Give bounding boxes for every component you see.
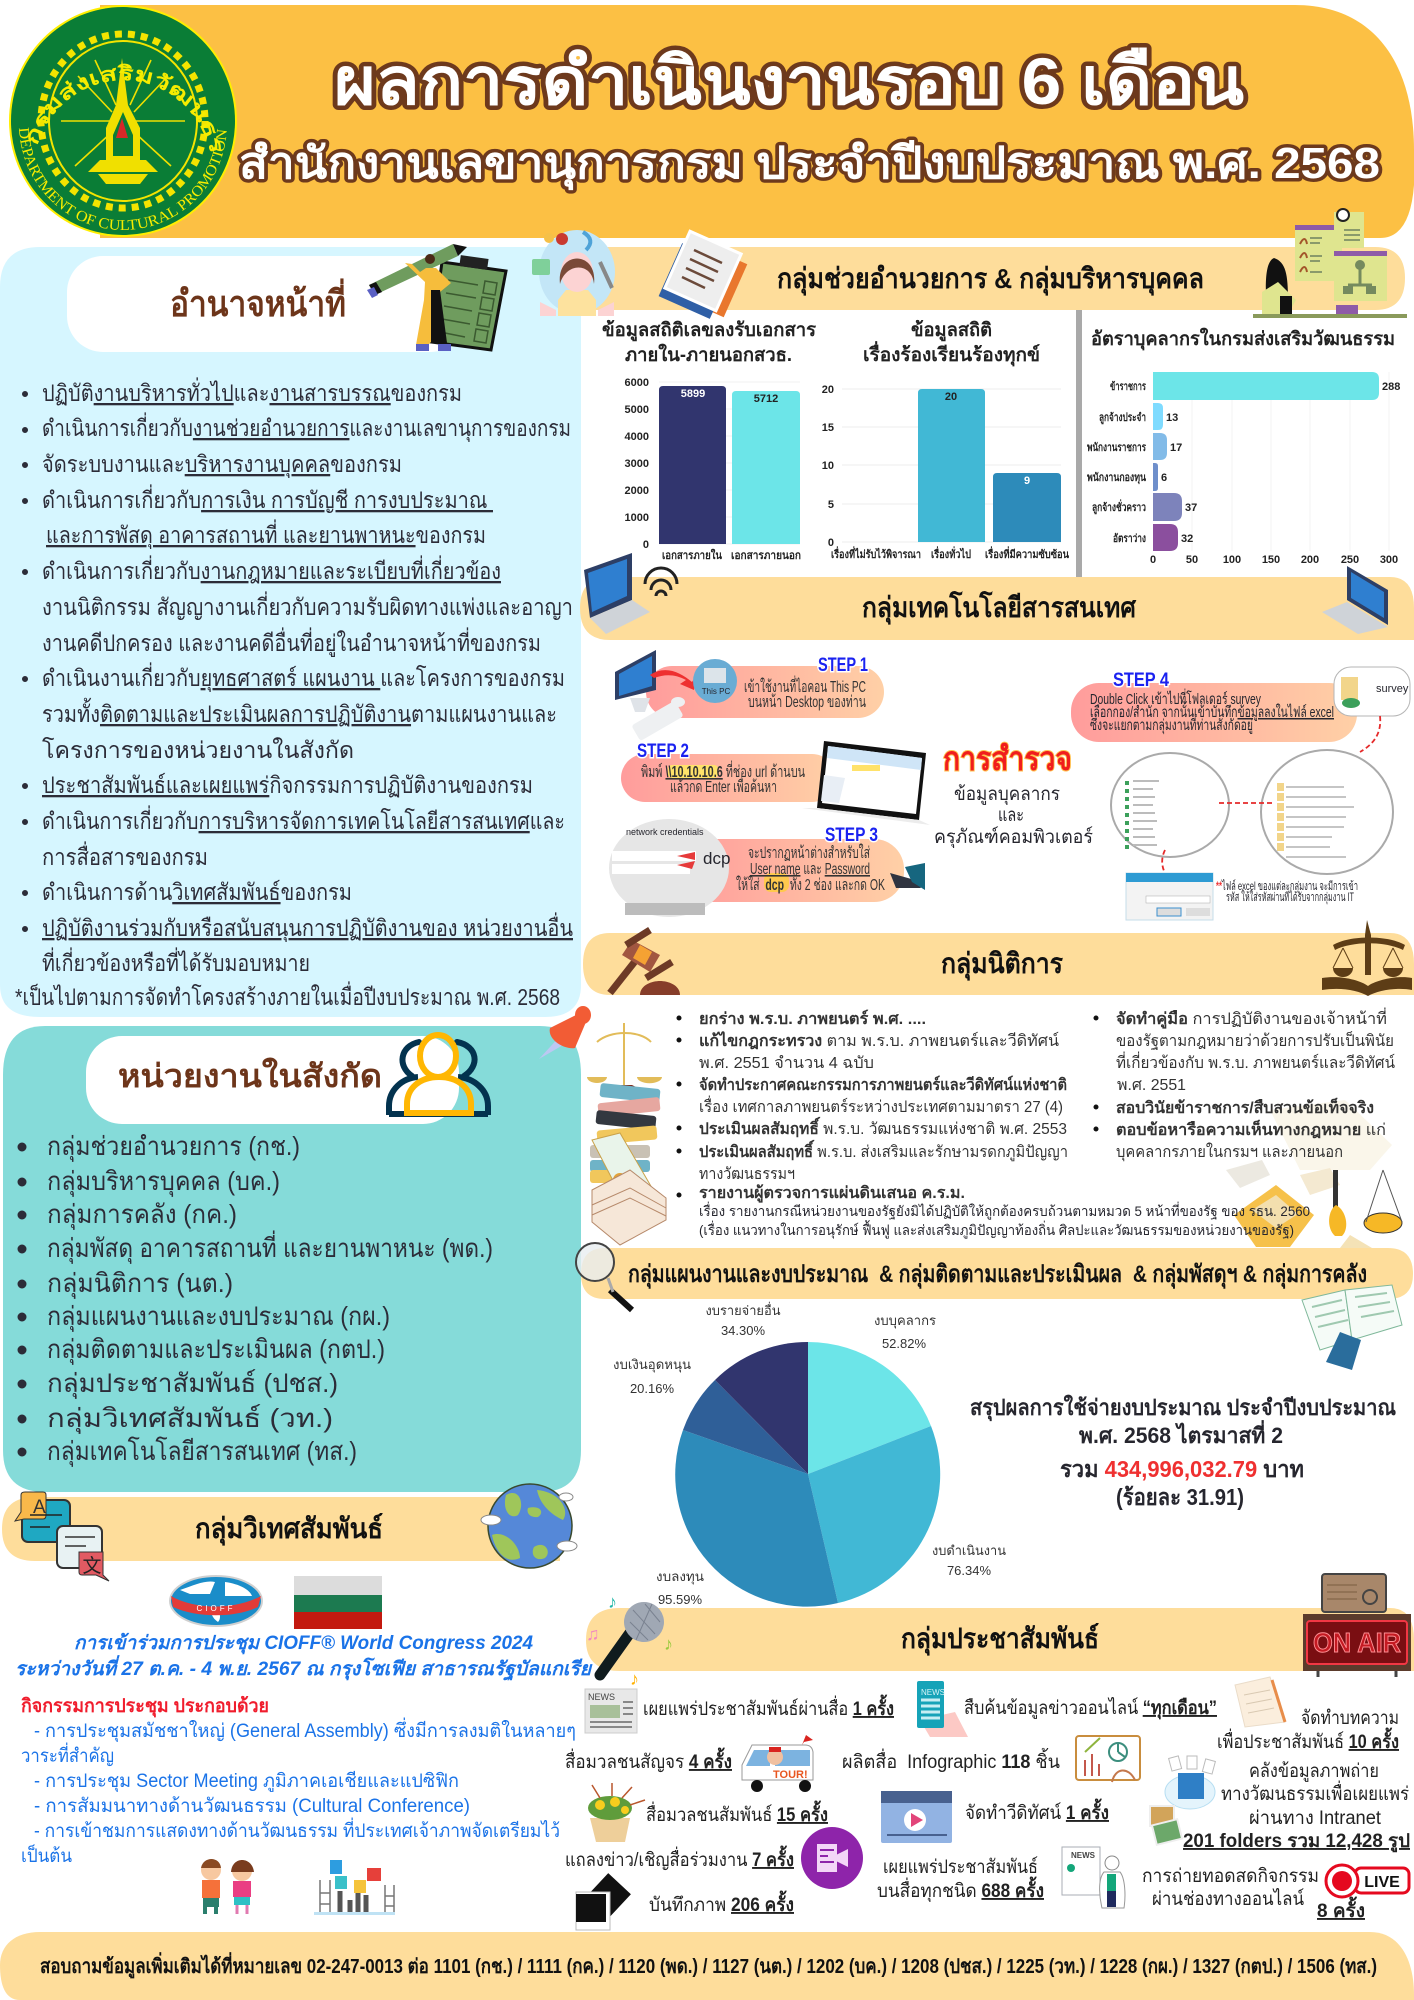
chart: budget pie: งบบุคลากร <box>874 1313 936 1329</box>
PR heading: กลุ่มประชาสัมพันธ์ <box>901 1623 1099 1656</box>
chart: documents received: 0 <box>643 539 649 551</box>
icon: notebook <box>1235 1677 1285 1727</box>
legal text left: ทางวัฒนธรรมฯ <box>699 1166 795 1183</box>
step 4: ซึ่งจะแยกตามกลุ่มงานที่ท่านสังกัดอยู่ <box>1090 714 1253 735</box>
chart: documents received: 6000 <box>625 377 649 389</box>
budget summary: รวม 434,996,032.79 บาท <box>1060 1456 1304 1482</box>
budget summary <box>970 1394 1396 1510</box>
chart: documents received <box>602 319 817 562</box>
units list <box>22 1131 493 1467</box>
chart: complaints: 5 <box>828 499 834 511</box>
icon: scales <box>1322 920 1412 996</box>
slice: investment <box>675 1430 838 1607</box>
icon: newspaper <box>585 1689 637 1733</box>
slice: subsidy <box>683 1380 808 1474</box>
icon: radio on air <box>1303 1574 1411 1677</box>
PR activities <box>565 1677 1410 1930</box>
slice: personnel <box>808 1342 931 1474</box>
step 3: network credentials <box>626 827 704 837</box>
icon: microphone <box>586 1592 673 1689</box>
chart: documents received: เอกสารภายใน <box>662 548 722 562</box>
chart: documents received: 5712 <box>754 393 778 405</box>
icon: microphone: ♪ <box>630 1669 639 1689</box>
panel: planning header band <box>581 1248 1413 1299</box>
congress activities: - การเข้าชมการแสดงทางด้านวัฒนธรรม ที่ประเทศเจ้าภาพจัดเตรียมไว้ <box>34 1817 560 1842</box>
PR activities: 201 folders รวม 12,428 รูป <box>1183 1831 1410 1853</box>
panel: duties <box>0 244 581 1017</box>
icon: infographic hand <box>1076 1736 1140 1782</box>
step 2: STEP 2 <box>637 741 689 762</box>
step 2: แล้วกด Enter เพื่อค้นหา <box>670 775 777 796</box>
duties list: ดำเนินการเกี่ยวกับงานช่วยอำนวยการและงานเลขานุการของกรม <box>42 412 571 442</box>
chart: budget pie: 52.82% <box>882 1336 926 1351</box>
icon: service woman <box>532 230 615 316</box>
duties list: การสื่อสารของกรม <box>42 841 208 870</box>
bars <box>1153 372 1379 400</box>
units list: กลุ่มวิเทศสัมพันธ์ (วท.) <box>47 1403 333 1434</box>
step 3: dcp <box>703 849 730 868</box>
legal text left: ประเมินผลสัมฤทธิ์ พ.ร.บ. วัฒนธรรมแห่งชาติ พ.ศ. 2553 <box>699 1117 1067 1138</box>
legal text left: เรื่อง รายงานกรณีหน่วยงานของรัฐยังมิได้ปฏิบัติให้ถูกต้องครบถ้วนตามหมวด 5 หน้าที่ของรัฐ ของ รธน. 2560 <box>699 1202 1310 1220</box>
chart: complaints: 15 <box>822 422 834 434</box>
icon: translate bubbles <box>15 1492 109 1581</box>
legal heading: กลุ่มนิติการ <box>941 948 1063 981</box>
duties list: และการพัสดุ อาคารสถานที่ และยานพาหนะของกรม <box>46 519 486 549</box>
icon: phone news: NEWS <box>921 1688 945 1697</box>
congress activities: - การประชุมสมัชชาใหญ่ (General Assembly) ซึ่งมีการลงมติในหลายๆ <box>34 1717 576 1743</box>
survey subtitle: ครุภัณฑ์คอมพิวเตอร์ <box>934 826 1093 849</box>
icon: microphone: ♫ <box>586 1624 600 1644</box>
chart: personnel: พนักงานราชการ <box>1087 441 1146 454</box>
step 1 <box>615 650 884 741</box>
legal text right: พ.ศ. 2551 <box>1117 1077 1186 1094</box>
chart: budget pie: งบลงทุน <box>656 1569 704 1585</box>
illustration: faded law scales <box>1226 1100 1402 1248</box>
bars <box>918 389 985 542</box>
budget summary: พ.ศ. 2568 ไตรมาสที่ 2 <box>1079 1419 1283 1448</box>
chart: personnel: ลูกจ้างชั่วคราว <box>1092 499 1146 515</box>
legal text left: รายงานผู้ตรวจการแผ่นดินเสนอ ค.ร.ม. <box>699 1184 965 1204</box>
chart: documents received: 4000 <box>625 431 649 443</box>
duties list: ดำเนินการเกี่ยวกับการบริหารจัดการเทคโนโลยีสารสนเทศและ <box>42 805 565 834</box>
congress title: การเข้าร่วมการประชุม CIOFF® World Congress 2024 <box>74 1632 533 1655</box>
legal text right: ตอบข้อหารือความเห็นทางกฎหมาย แก่ <box>1116 1118 1386 1139</box>
chart: personnel: 150 <box>1262 554 1280 566</box>
icon: flower basket <box>588 1783 645 1842</box>
PR activities: การถ่ายทอดสดกิจกรรม <box>1142 1866 1319 1887</box>
chart: documents received: 5899 <box>681 388 705 400</box>
chart: personnel: พนักงานกองทุน <box>1087 471 1146 485</box>
units list: กลุ่มนิติการ (นต.) <box>47 1268 233 1299</box>
PR activities: บันทึกภาพ 206 ครั้ง <box>649 1890 794 1916</box>
duties list: ดำเนินงานเกี่ยวกับยุทธศาสตร์ แผนงาน และโครงการของกรม <box>42 662 565 692</box>
chart: complaints: 20 <box>822 384 834 396</box>
step 3: จะปรากฏหน้าต่างสำหรับใส่ <box>748 843 870 862</box>
chart: personnel: 6 <box>1161 472 1167 484</box>
units list: กลุ่มการคลัง (กค.) <box>47 1199 237 1230</box>
icon: news presenter: NEWS <box>1071 1851 1096 1860</box>
chart: budget pie: 76.34% <box>947 1563 991 1578</box>
legal text left: จัดทำประกาศคณะกรรมการภาพยนตร์และวีดิทัศน์แห่งชาติ <box>699 1075 1067 1094</box>
duties list <box>15 377 573 1010</box>
duties list: ปฏิบัติงานบริหารทั่วไปและงานสารบรรณของกรม <box>42 377 462 406</box>
icon: book and calculator <box>1302 1285 1402 1370</box>
chart: complaints: เรื่องทั่วไป <box>931 546 971 561</box>
IT heading: กลุ่มเทคโนโลยีสารสนเทศ <box>862 590 1137 625</box>
survey folder bubble <box>1334 667 1410 716</box>
icon: laptop window <box>802 741 930 825</box>
step 2 <box>621 741 930 825</box>
flag: Bulgaria <box>294 1576 382 1629</box>
chart: budget pie: งบเงินอุดหนุน <box>613 1357 691 1373</box>
duties list: รวมทั้งติดตามและประเมินผลการปฏิบัติงานตามแผนงานและ <box>42 698 557 727</box>
duties list: โครงการของหน่วยงานในสังกัด <box>42 737 354 763</box>
chart title: อัตราบุคลากรในกรมส่งเสริมวัฒนธรรม <box>1091 327 1395 351</box>
dialog <box>1126 873 1213 920</box>
step 3: STEP 3 <box>825 825 878 846</box>
survey subtitle <box>934 784 1093 849</box>
units list: กลุ่มแผนงานและงบประมาณ (กผ.) <box>47 1301 390 1332</box>
duties list: ปฏิบัติงานร่วมกับหรือสนับสนุนการปฏิบัติงานของ หน่วยงานอื่น <box>42 912 573 942</box>
slice: other <box>715 1342 808 1474</box>
congress title <box>15 1632 593 1681</box>
legal text right: ของรัฐตามกฎหมายว่าด้วยการปรับเป็นพินัย <box>1116 1030 1394 1050</box>
chart: complaints: 0 <box>828 537 834 549</box>
chart: complaints: เรื่องที่ไม่รับไว้พิจารณา <box>831 546 921 561</box>
chart: budget pie: งบดำเนินงาน <box>932 1543 1006 1558</box>
icon: push pin <box>539 1006 591 1059</box>
survey folder bubble: survey <box>1376 683 1409 695</box>
PR activities: สื่อมวลชนสัญจร 4 ครั้ง <box>565 1747 732 1773</box>
chart: personnel: 37 <box>1185 502 1197 514</box>
icon: globe <box>481 1484 577 1568</box>
chart: documents received: 5000 <box>625 404 649 416</box>
PR activities: แถลงข่าว/เชิญสื่อร่วมงาน 7 ครั้ง <box>565 1845 794 1871</box>
header band <box>100 5 1414 238</box>
icon: radio on air: ON AIR <box>1313 1627 1401 1658</box>
chart: personnel: 288 <box>1382 381 1400 393</box>
icon: newspaper: NEWS <box>588 1692 615 1702</box>
panel: affiliated units <box>3 1026 581 1492</box>
chart: personnel: 100 <box>1223 554 1241 566</box>
icon: video player <box>881 1791 952 1843</box>
legal text right: สอบวินัยข้าราชการ/สืบสวนข้อเท็จจริง <box>1116 1096 1374 1117</box>
title: ผลการดำเนินงานรอบ 6 เดือน <box>334 44 1244 118</box>
excel note <box>1216 879 1358 905</box>
icon: people <box>389 1035 488 1115</box>
legal text left: ยกร่าง พ.ร.บ. ภาพยนตร์ พ.ศ. .... <box>699 1009 926 1028</box>
step 4 <box>1071 667 1410 920</box>
step 1: เข้าใช้งานที่ไอคอน This PC <box>744 675 866 696</box>
chart: budget pie: 20.16% <box>630 1381 674 1396</box>
panel: admin and HR header band <box>590 247 1405 310</box>
step 1: บนหน้า Desktop ของท่าน <box>748 693 866 711</box>
panel: PR header band <box>586 1574 1414 1689</box>
icon: desktop <box>615 650 696 741</box>
icon: person with pencil and clipboard <box>367 244 506 351</box>
chart: complaints: เรื่องที่มีความซับซ้อน <box>985 546 1069 561</box>
icon: photo cloud <box>1150 1756 1215 1845</box>
chart: documents received: ภายใน-ภายนอกสวธ. <box>625 343 792 366</box>
chart: complaints: เรื่องร้องเรียนร้องทุกข์ <box>863 341 1040 367</box>
duties list: *เป็นไปตามการจัดทำโครงสร้างภายในเมื่อปีงบประมาณ พ.ศ. 2568 <box>15 981 560 1010</box>
step 4: STEP 4 <box>1113 670 1169 691</box>
folder window right <box>1261 750 1393 874</box>
icon: documents <box>659 231 747 319</box>
icon: photos <box>576 1871 633 1930</box>
legal text right <box>1096 1007 1395 1162</box>
chart: personnel: 200 <box>1301 554 1319 566</box>
step 3: ให้ใส่ dcp ทั้ง 2 ช่อง และกด OK <box>736 873 885 894</box>
chart: personnel: 0 <box>1150 554 1156 566</box>
icon: tour van: TOUR! <box>773 1769 808 1781</box>
PR activities: ผ่านทาง Intranet <box>1249 1808 1382 1829</box>
PR activities: เผยแพร่ประชาสัมพันธ์ผ่านสื่อ 1 ครั้ง <box>643 1694 894 1720</box>
PR activities: สื่อมวลชนสัมพันธ์ 15 ครั้ง <box>646 1800 828 1826</box>
congress activities: เป็นต้น <box>21 1843 72 1867</box>
PR activities: จัดทำวีดิทัศน์ 1 ครั้ง <box>965 1798 1109 1824</box>
PR activities: 8 ครั้ง <box>1317 1896 1365 1922</box>
chart: personnel: อัตราว่าง <box>1113 532 1146 545</box>
icon: magnifier <box>576 1243 632 1310</box>
subtitle: สำนักงานเลขานุการกรม ประจำปีงบประมาณ พ.ศ. 2568 <box>239 139 1380 191</box>
legal text left <box>679 1009 1310 1239</box>
step 1: This PC <box>702 687 730 696</box>
chart title: ข้อมูลสถิติ <box>911 319 992 342</box>
icon: laptop and wifi <box>584 553 677 634</box>
congress title: ระหว่างวันที่ 27 ต.ค. - 4 พ.ย. 2567 ณ กรุงโซเฟีย สาธารณรัฐบัลแกเรีย <box>15 1655 593 1681</box>
units heading: หน่วยงานในสังกัด <box>118 1057 382 1094</box>
icon: gavel <box>610 930 680 995</box>
legal text left: แก้ไขกฎกระทรวง ตาม พ.ร.บ. ภาพยนตร์และวีดิทัศน์ <box>699 1031 1059 1050</box>
survey section <box>609 650 1410 920</box>
chart: personnel: ข้าราชการ <box>1110 380 1146 393</box>
PR activities: เพื่อประชาสัมพันธ์ 10 ครั้ง <box>1217 1727 1399 1753</box>
icon: tour van <box>742 1735 813 1792</box>
duties list: จัดระบบงานและบริหารงานบุคคลของกรม <box>42 451 402 478</box>
legal text right: จัดทำคู่มือ การปฏิบัติงานของเจ้าหน้าที่ <box>1116 1007 1387 1030</box>
panel: IT header band <box>580 577 1414 640</box>
legal text left: เรื่อง เทศกาลภาพยนตร์ระหว่างประเทศตามมาตรา 27 (4) <box>699 1095 1063 1116</box>
icon: microphone: ♪ <box>664 1634 673 1654</box>
chart: personnel: 300 <box>1380 554 1398 566</box>
survey title: การสำรวจ <box>943 740 1072 777</box>
legal text left: (เรื่อง แนวทางในการอนุรักษ์ ฟื้นฟู และส่งเสริมภูมิปัญญาท้องถิ่น ศิลปะและวัฒนธรรมของหน่วยงานของรัฐ) <box>699 1220 1294 1239</box>
PR activities: สืบค้นข้อมูลข่าวออนไลน์ “ทุกเดือน” <box>964 1697 1217 1720</box>
units list: กลุ่มช่วยอำนวยการ (กช.) <box>47 1131 300 1162</box>
slice: operations <box>808 1426 940 1603</box>
chart: complaints: 9 <box>1024 475 1030 487</box>
step 3 <box>609 819 925 917</box>
icon: microphone: ♪ <box>608 1592 617 1612</box>
legal text left: พ.ศ. 2551 จำนวน 4 ฉบับ <box>699 1055 874 1072</box>
duties list: ดำเนินการเกี่ยวกับการเงิน การบัญชี การงบประมาณ <box>42 484 493 513</box>
logo: department emblem: DEPARTMENT OF CULTURAL PROMOTION <box>18 128 227 230</box>
icon: phone news <box>917 1681 968 1737</box>
duties list: ดำเนินการด้านวิเทศสัมพันธ์ของกรม <box>42 879 352 905</box>
chart: documents received: 3000 <box>625 458 649 470</box>
budget summary: (ร้อยละ 31.91) <box>1116 1484 1244 1510</box>
survey subtitle: ข้อมูลบุคลากร <box>954 784 1060 806</box>
foreign affairs heading: กลุ่มวิเทศสัมพันธ์ <box>195 1513 383 1546</box>
PR activities: ผ่านช่องทางออนไลน์ <box>1152 1888 1304 1910</box>
chart: personnel: 17 <box>1170 442 1182 454</box>
logo: CIOFF globe: CIOFF <box>196 1604 236 1613</box>
bars <box>659 386 726 544</box>
chart title: ข้อมูลสถิติเลขลงรับเอกสาร <box>602 319 817 342</box>
units list: กลุ่มบริหารบุคคล (บค.) <box>47 1166 280 1197</box>
units list: กลุ่มประชาสัมพันธ์ (ปชส.) <box>47 1368 338 1399</box>
chart: complaints: 10 <box>822 460 834 472</box>
icon: live badge <box>1326 1865 1409 1897</box>
chart: documents received: 1000 <box>625 512 649 524</box>
duties heading: อำนาจหน้าที่ <box>170 278 346 324</box>
PR activities: บนสื่อทุกชนิด 688 ครั้ง <box>877 1876 1044 1903</box>
icon: scales books and paper <box>587 1023 666 1245</box>
legal text left: ประเมินผลสัมฤทธิ์ พ.ร.บ. ส่งเสริมและรักษามรดกภูมิปัญญา <box>699 1140 1068 1162</box>
step 2: พิมพ์ \\10.10.10.6 ที่ช่อง url ด้านบน <box>641 760 805 781</box>
panel: foreign affairs header band <box>2 1484 577 1581</box>
icon: translate bubbles: A <box>33 1497 46 1518</box>
congress activities <box>21 1695 576 1867</box>
folder window left <box>1111 753 1229 857</box>
admin heading: กลุ่มช่วยอำนวยการ & กลุ่มบริหารบุคคล <box>777 263 1204 296</box>
duties list: ประชาสัมพันธ์และเผยแพร่กิจกรรมการปฏิบัติงานของกรม <box>42 772 533 798</box>
logo: department emblem <box>9 5 237 237</box>
chart: budget pie <box>613 1302 1006 1607</box>
duties heading pill <box>67 256 467 352</box>
chart: budget pie: 34.30% <box>721 1323 765 1338</box>
footer contact band <box>0 1932 1414 2000</box>
chart: complaints: 20 <box>945 391 957 403</box>
congress activities: - การสัมมนาทางด้านวัฒนธรรม (Cultural Conference) <box>34 1796 470 1817</box>
units list: กลุ่มพัสดุ อาคารสถานที่ และยานพาหนะ (พด.) <box>47 1230 493 1264</box>
step 3: User name และ Password <box>750 861 870 878</box>
chart: complaints <box>822 319 1069 561</box>
chart: budget pie: 95.59% <box>658 1592 702 1607</box>
duties list: งานนิติกรรม สัญญางานเกี่ยวกับความรับผิดทางแพ่งและอาญา <box>42 591 573 620</box>
chart: personnel: 32 <box>1181 533 1193 545</box>
congress activities: วาระที่สำคัญ <box>21 1742 114 1767</box>
duties list: ที่เกี่ยวข้องหรือที่ได้รับมอบหมาย <box>42 947 310 976</box>
icon: keyboard hands <box>890 863 925 890</box>
icon: woman with flowchart <box>1253 209 1407 318</box>
units list: กลุ่มเทคโนโลยีสารสนเทศ (ทส.) <box>47 1436 357 1467</box>
step 4: Double Click เข้าไปที่โฟลเดอร์ survey <box>1090 688 1261 708</box>
chart: documents received: เอกสารภายนอก <box>731 550 801 562</box>
icon: news presenter <box>1062 1847 1125 1908</box>
legal text right: บุคคลากรภายในกรมฯ และภายนอก <box>1116 1142 1343 1162</box>
units heading pill <box>86 1036 459 1124</box>
icon: live badge: LIVE <box>1364 1874 1400 1891</box>
duties list: ดำเนินการเกี่ยวกับงานกฎหมายและระเบียบที่เกี่ยวข้อง <box>42 555 501 584</box>
duties list: งานคดีปกครอง และงานคดีอื่นที่อยู่ในอำนาจหน้าที่ของกรม <box>42 627 541 657</box>
chart: personnel: 13 <box>1166 412 1178 424</box>
panel: legal header band <box>583 920 1414 996</box>
units list: กลุ่มติดตามและประเมินผล (กตป.) <box>47 1334 385 1365</box>
congress activities: กิจกรรมการประชุม ประกอบด้วย <box>21 1695 269 1718</box>
chart: personnel: 250 <box>1341 554 1359 566</box>
chart: personnel: ลูกจ้างประจำ <box>1099 411 1146 425</box>
chart: personnel <box>1087 327 1400 566</box>
step 1: STEP 1 <box>818 655 868 676</box>
step 4: เลือกกอง/สำนัก จากนั้นเข้าบันทึกข้อมูลลงในไฟล์ excel <box>1090 701 1334 721</box>
PR activities: คลังข้อมูลภาพถ่าย <box>1249 1761 1379 1782</box>
illustration: children <box>201 1859 254 1914</box>
survey subtitle: และ <box>998 805 1024 826</box>
chart: budget pie: งบรายจ่ายอื่น <box>706 1302 781 1318</box>
legal text right: ที่เกี่ยวข้องกับ พ.ร.บ. ภาพยนตร์และวีดิทัศน์ <box>1116 1051 1395 1072</box>
chart: documents received: 2000 <box>625 485 649 497</box>
logo: CIOFF globe <box>170 1576 262 1626</box>
chart: personnel: 50 <box>1186 554 1198 566</box>
icon: laptop right <box>1322 566 1388 634</box>
illustration: puzzle team <box>314 1860 395 1915</box>
icon: press release circle <box>801 1827 863 1889</box>
PR activities: ผลิตสื่อ Infographic 118 ชิ้น <box>842 1748 1060 1773</box>
icon: translate bubbles: 文 <box>82 1555 102 1577</box>
congress activities: - การประชุม Sector Meeting ภูมิภาคเอเชียและแปซิฟิก <box>34 1770 459 1793</box>
PR activities: เผยแพร่ประชาสัมพันธ์ <box>883 1856 1038 1878</box>
